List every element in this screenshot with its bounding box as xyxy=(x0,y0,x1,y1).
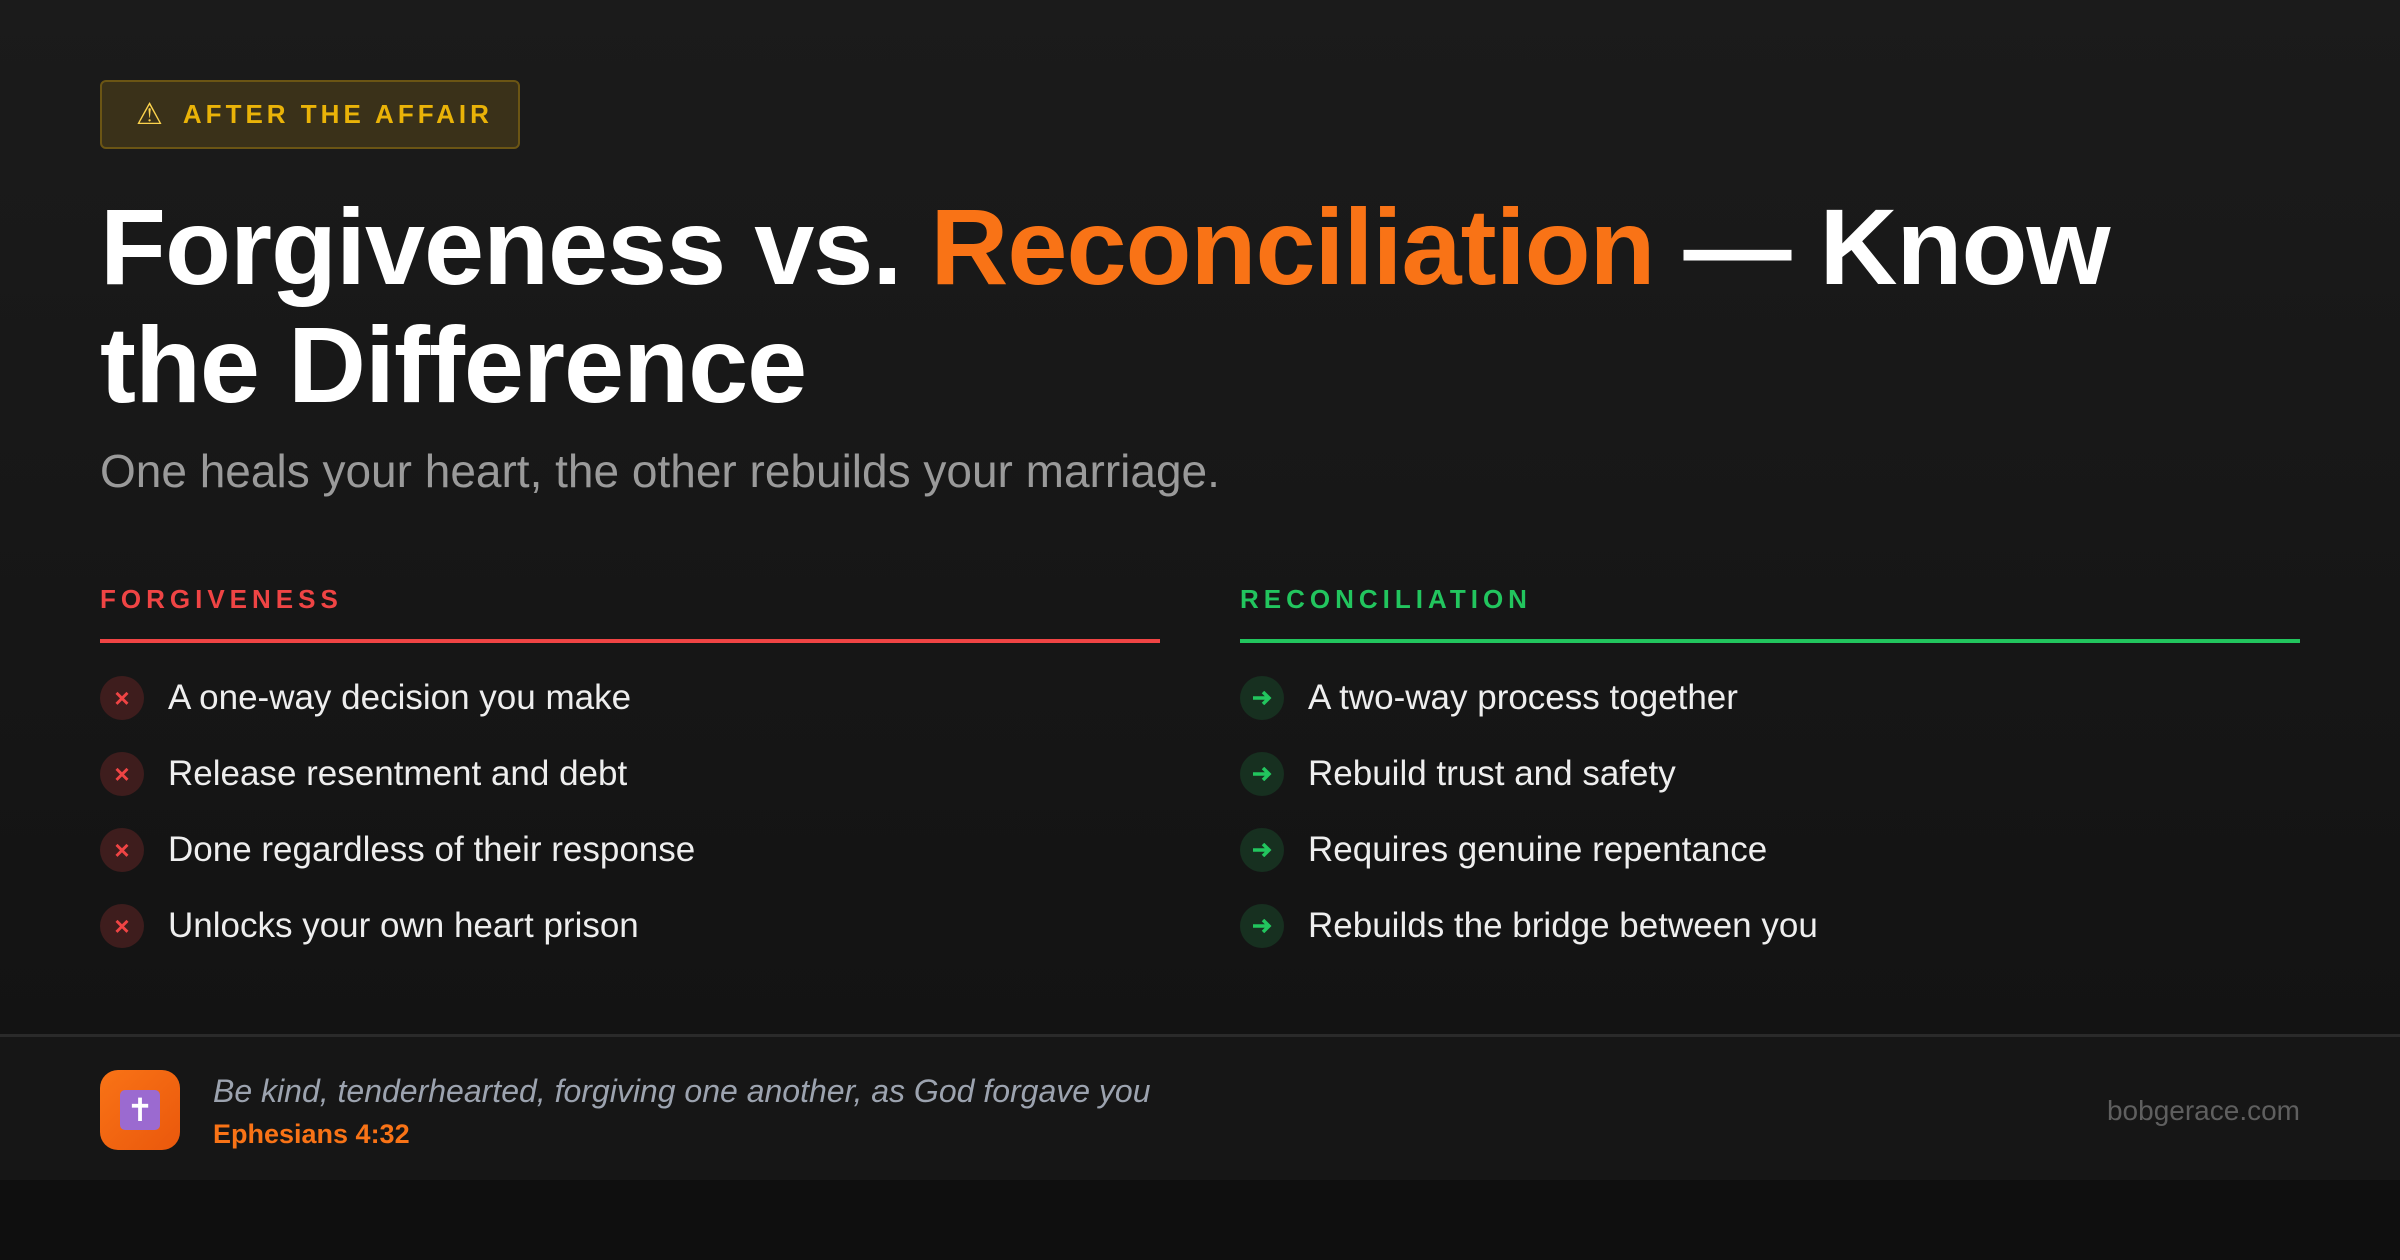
item: A two-way process together xyxy=(1308,678,1738,717)
heading: reconciliation: RECONCILIATION xyxy=(1240,584,1532,614)
item: × xyxy=(114,683,130,713)
quote: Be kind, tenderhearted, forgiving one another, as God forgave you xyxy=(213,1073,1151,1109)
reference: Ephesians 4:32 xyxy=(213,1119,410,1149)
item: Rebuilds the bridge between you xyxy=(1308,906,1818,945)
item: × xyxy=(114,835,130,865)
item: Release resentment and debt xyxy=(168,754,627,793)
item: Unlocks your own heart prison xyxy=(168,906,639,945)
icon: cross xyxy=(100,1070,180,1150)
icon: cross: ✝ xyxy=(127,1092,153,1128)
item: × xyxy=(114,911,130,941)
footer xyxy=(0,1034,2400,1180)
heading: forgiveness: FORGIVENESS xyxy=(100,584,343,614)
list: reconciliation xyxy=(1240,676,1818,948)
list: forgiveness xyxy=(100,676,695,948)
title: Forgiveness vs. Reconciliation — Know xyxy=(100,186,2109,307)
item: Rebuild trust and safety xyxy=(1308,754,1676,793)
title xyxy=(100,186,2111,425)
subtitle: One heals your heart, the other rebuilds your marriage. xyxy=(100,445,1220,497)
item: A one-way decision you make xyxy=(168,678,631,717)
item: Requires genuine repentance xyxy=(1308,830,1767,869)
item: Done regardless of their response xyxy=(168,830,695,869)
badge: after the affair xyxy=(100,80,520,149)
item: × xyxy=(114,759,130,789)
badge: after the affair: ⚠ xyxy=(136,98,167,131)
badge: after the affair: AFTER THE AFFAIR xyxy=(183,99,493,129)
title: the Difference xyxy=(100,304,806,425)
site url: bobgerace.com xyxy=(2107,1095,2300,1126)
